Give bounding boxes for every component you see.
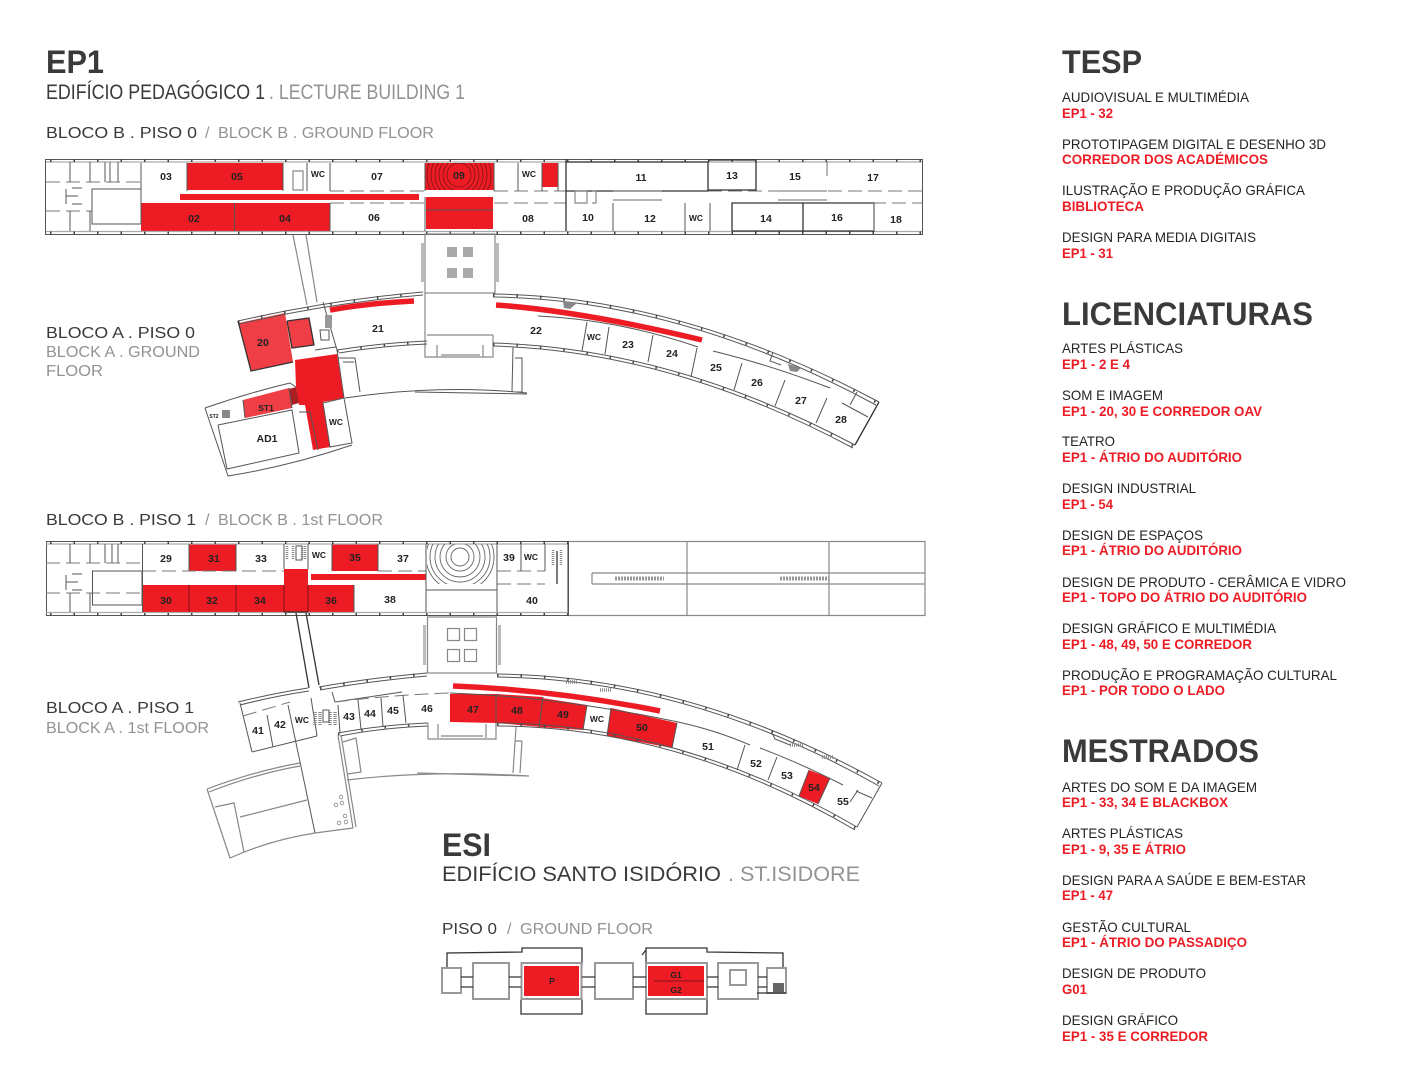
label: block A ground floor bbox=[46, 325, 200, 380]
floor plan: block A ground floor: 22 bbox=[530, 325, 542, 337]
floor plan: block B ground floor: 02 bbox=[188, 213, 200, 225]
floor plan: block A first floor: 51 bbox=[702, 741, 714, 753]
floor plan: block A ground floor bbox=[205, 234, 879, 476]
floor plan: block A ground floor: 21 bbox=[372, 323, 384, 335]
floor plan: block B first floor: 33 bbox=[255, 553, 267, 565]
list: MESTRADOS bbox=[1062, 733, 1306, 1044]
heading: ESI bbox=[442, 827, 860, 886]
floor plan: block B first floor: 38 bbox=[384, 594, 396, 606]
list: TESP: BIBLIOTECA bbox=[1062, 198, 1144, 214]
list: MESTRADOS: DESIGN DE PRODUTO bbox=[1062, 965, 1206, 981]
floor plan: block A first floor: 52 bbox=[750, 758, 762, 770]
floor plan: block A first floor bbox=[207, 613, 882, 858]
label: block A first floor: BLOCO A . PISO 1 bbox=[46, 700, 194, 717]
floor plan: block A first floor: 49 bbox=[557, 709, 569, 721]
list: LICENCIATURAS: DESIGN DE ESPAÇOS bbox=[1062, 527, 1203, 543]
floor plan: block A ground floor: 27 bbox=[795, 395, 807, 407]
floor plan: block B first floor: 40 bbox=[526, 595, 538, 607]
floor plan: ESI ground floor: G2 bbox=[670, 985, 682, 995]
label: block A first floor bbox=[46, 700, 209, 737]
label: block B first floor bbox=[46, 512, 383, 529]
list: MESTRADOS: EP1 - 33, 34 E BLACKBOX bbox=[1062, 794, 1229, 810]
floor plan: block A first floor: 53 bbox=[781, 770, 793, 782]
floor plan: block B first floor: 39 bbox=[503, 552, 515, 564]
label: block B ground floor: BLOCO B . PISO 0 bbox=[46, 125, 197, 142]
floor plan: block B ground floor: WC bbox=[522, 169, 536, 179]
floor plan: ESI ground floor bbox=[442, 948, 786, 1014]
list: LICENCIATURAS: ARTES PLÁSTICAS bbox=[1062, 340, 1183, 356]
list: TESP: EP1 - 32 bbox=[1062, 105, 1113, 121]
label: block A ground floor: FLOOR bbox=[46, 363, 103, 380]
floor plan: block B first floor: 37 bbox=[397, 553, 409, 565]
list: LICENCIATURAS: DESIGN GRÁFICO E MULTIMÉDIA bbox=[1062, 620, 1277, 636]
list: LICENCIATURAS: EP1 - ÁTRIO DO AUDITÓRIO bbox=[1062, 448, 1242, 465]
list: LICENCIATURAS bbox=[1062, 296, 1346, 698]
floor plan: block A ground floor: 28 bbox=[835, 414, 847, 426]
list: LICENCIATURAS: DESIGN INDUSTRIAL bbox=[1062, 480, 1196, 496]
floor plan: block A ground floor: 25 bbox=[710, 362, 722, 374]
list: LICENCIATURAS: EP1 - 48, 49, 50 E CORREDOR bbox=[1062, 636, 1252, 652]
floor plan: block A first floor: 50 bbox=[636, 722, 648, 734]
floor plan: block B ground floor: 14 bbox=[760, 213, 772, 225]
label: block B first floor: BLOCK B . 1st FLOOR bbox=[218, 512, 383, 529]
floor plan: block B ground floor: 11 bbox=[635, 172, 647, 184]
label: block B first floor: BLOCO B . PISO 1 bbox=[46, 512, 196, 529]
floor plan: block B ground floor: WC bbox=[311, 169, 325, 179]
floor plan: block B first floor: 31 bbox=[208, 553, 220, 565]
list: LICENCIATURAS: EP1 - ÁTRIO DO AUDITÓRIO bbox=[1062, 541, 1242, 558]
floor plan: block A first floor: WC bbox=[295, 715, 309, 725]
floor plan: block B ground floor: 03 bbox=[160, 171, 172, 183]
label: block B ground floor: BLOCK B . GROUND FLOOR bbox=[218, 125, 434, 142]
list: LICENCIATURAS: EP1 - 20, 30 E CORREDOR OAV bbox=[1062, 403, 1263, 419]
floor plan: block A first floor: WC bbox=[590, 714, 604, 724]
heading: EP1: . LECTURE BUILDING 1 bbox=[269, 81, 465, 104]
heading: EP1: EDIFÍCIO PEDAGÓGICO 1 bbox=[46, 81, 265, 104]
list: TESP: ILUSTRAÇÃO E PRODUÇÃO GRÁFICA bbox=[1062, 182, 1306, 198]
floor plan: block A first floor: 41 bbox=[252, 725, 264, 737]
list: MESTRADOS: G01 bbox=[1062, 981, 1087, 997]
label: ESI ground floor: GROUND FLOOR bbox=[520, 921, 653, 938]
floor plan: block B ground floor: 07 bbox=[371, 171, 383, 183]
list: LICENCIATURAS: EP1 - 2 E 4 bbox=[1062, 356, 1130, 372]
label: block A ground floor: BLOCK A . GROUND bbox=[46, 344, 200, 361]
label: block B first floor: / bbox=[205, 512, 210, 529]
floor plan: block B ground floor: 09 bbox=[453, 170, 465, 182]
floor plan: block B ground floor: 15 bbox=[789, 171, 801, 183]
list: TESP bbox=[1062, 44, 1326, 261]
floor plan: block B ground floor: 05 bbox=[231, 171, 243, 183]
floor plan: block B first floor: 36 bbox=[325, 595, 337, 607]
label: block A first floor: BLOCK A . 1st FLOOR bbox=[46, 720, 209, 737]
floor plan: block B ground floor: 18 bbox=[890, 214, 902, 226]
floor plan: block B ground floor: 12 bbox=[644, 213, 656, 225]
list: LICENCIATURAS: EP1 - 54 bbox=[1062, 496, 1113, 512]
floor plan: block B first floor: 30 bbox=[160, 595, 172, 607]
label: ESI ground floor bbox=[442, 921, 653, 938]
floor plan: block B ground floor: WC bbox=[689, 213, 703, 223]
heading: ESI: . ST.ISIDORE bbox=[728, 863, 860, 886]
heading: ESI: EDIFÍCIO SANTO ISIDÓRIO bbox=[442, 863, 721, 886]
floor plan: block A first floor: 42 bbox=[274, 719, 286, 731]
list: LICENCIATURAS: EP1 - TOPO DO ÁTRIO DO AUDITÓRIO bbox=[1062, 588, 1307, 605]
floor plan: block A ground floor: 24 bbox=[666, 348, 678, 360]
floor plan: block A first floor: 54 bbox=[808, 782, 820, 794]
floor plan: block B first floor bbox=[46, 540, 926, 616]
floor plan: block B ground floor: 13 bbox=[726, 170, 738, 182]
list: LICENCIATURAS: SOM E IMAGEM bbox=[1062, 387, 1163, 403]
floor plan: block B ground floor: 10 bbox=[582, 212, 594, 224]
label: block A ground floor: BLOCO A . PISO 0 bbox=[46, 325, 195, 342]
floor plan: block A first floor: 47 bbox=[467, 704, 479, 716]
floor plan: block A first floor: 44 bbox=[364, 708, 376, 720]
list: MESTRADOS: EP1 - 9, 35 E ÁTRIO bbox=[1062, 841, 1186, 857]
floor plan: block B first floor: WC bbox=[312, 550, 326, 560]
list: TESP: AUDIOVISUAL E MULTIMÉDIA bbox=[1062, 89, 1250, 105]
list: MESTRADOS: EP1 - 47 bbox=[1062, 887, 1113, 903]
list: MESTRADOS: ARTES PLÁSTICAS bbox=[1062, 825, 1183, 841]
floor plan: block B first floor: 32 bbox=[206, 595, 218, 607]
list: LICENCIATURAS: PRODUÇÃO E PROGRAMAÇÃO CULTURAL bbox=[1062, 667, 1337, 683]
floor plan: block B ground floor: 17 bbox=[867, 172, 879, 184]
list: MESTRADOS: EP1 - ÁTRIO DO PASSADIÇO bbox=[1062, 934, 1247, 950]
floor plan: block A ground floor: ST2 bbox=[209, 414, 219, 420]
floor plan: block A ground floor: WC bbox=[587, 332, 601, 342]
label: block B ground floor: / bbox=[205, 125, 210, 142]
floor plan: block B ground floor: 04 bbox=[279, 213, 291, 225]
floor plan: block A ground floor: 20 bbox=[257, 337, 269, 349]
heading: EP1: EP1 bbox=[46, 44, 104, 80]
floor plan: block A ground floor: 26 bbox=[751, 377, 763, 389]
list: TESP: CORREDOR DOS ACADÉMICOS bbox=[1062, 151, 1268, 167]
floor plan: block A first floor: 45 bbox=[387, 705, 399, 717]
heading: ESI: ESI bbox=[442, 827, 491, 863]
floor plan: block A ground floor: WC bbox=[329, 417, 343, 427]
list: TESP: EP1 - 31 bbox=[1062, 245, 1113, 261]
floor plan: block A ground floor: ST1 bbox=[258, 403, 274, 413]
list: LICENCIATURAS: TEATRO bbox=[1062, 433, 1115, 449]
label: block B ground floor bbox=[46, 125, 434, 142]
floor plan: block B first floor: WC bbox=[524, 552, 538, 562]
floor plan: ESI ground floor: P bbox=[549, 976, 555, 986]
floor plan: block A first floor: 55 bbox=[837, 796, 849, 808]
list: LICENCIATURAS: LICENCIATURAS bbox=[1062, 296, 1313, 332]
floor plan: block A first floor: 48 bbox=[511, 705, 523, 717]
floor plan: block A ground floor: 23 bbox=[622, 339, 634, 351]
floor plan: block B ground floor: 08 bbox=[522, 213, 534, 225]
list: MESTRADOS: EP1 - 35 E CORREDOR bbox=[1062, 1028, 1208, 1044]
floor plan: block A first floor: 46 bbox=[421, 703, 433, 715]
floor plan: block B ground floor: 16 bbox=[831, 212, 843, 224]
list: LICENCIATURAS: DESIGN DE PRODUTO - CERÂMICA E VIDRO bbox=[1062, 574, 1346, 590]
list: MESTRADOS: GESTÃO CULTURAL bbox=[1062, 919, 1191, 935]
label: ESI ground floor: PISO 0 bbox=[442, 921, 497, 938]
floor plan: block B first floor: 29 bbox=[160, 553, 172, 565]
heading: EP1 bbox=[46, 44, 465, 104]
list: TESP: PROTOTIPAGEM DIGITAL E DESENHO 3D bbox=[1062, 136, 1326, 152]
label: ESI ground floor: / bbox=[507, 921, 512, 938]
list: TESP: DESIGN PARA MEDIA DIGITAIS bbox=[1062, 229, 1256, 245]
floor plan: block B first floor: 35 bbox=[349, 552, 361, 564]
floor plan: block B first floor: 34 bbox=[254, 595, 266, 607]
floor plan: ESI ground floor: G1 bbox=[670, 970, 682, 980]
floor plan: block B ground floor bbox=[45, 159, 923, 235]
floor plan: block A first floor: 43 bbox=[343, 711, 355, 723]
list: MESTRADOS: DESIGN PARA A SAÚDE E BEM-ESTAR bbox=[1062, 872, 1306, 888]
list: MESTRADOS: ARTES DO SOM E DA IMAGEM bbox=[1062, 779, 1257, 795]
list: MESTRADOS: MESTRADOS bbox=[1062, 733, 1259, 769]
floor plan: block B ground floor: 06 bbox=[368, 212, 380, 224]
floor plan: block A ground floor: AD1 bbox=[256, 433, 278, 445]
list: MESTRADOS: DESIGN GRÁFICO bbox=[1062, 1012, 1178, 1028]
list: TESP: TESP bbox=[1062, 44, 1142, 80]
list: LICENCIATURAS: EP1 - POR TODO O LADO bbox=[1062, 682, 1225, 698]
